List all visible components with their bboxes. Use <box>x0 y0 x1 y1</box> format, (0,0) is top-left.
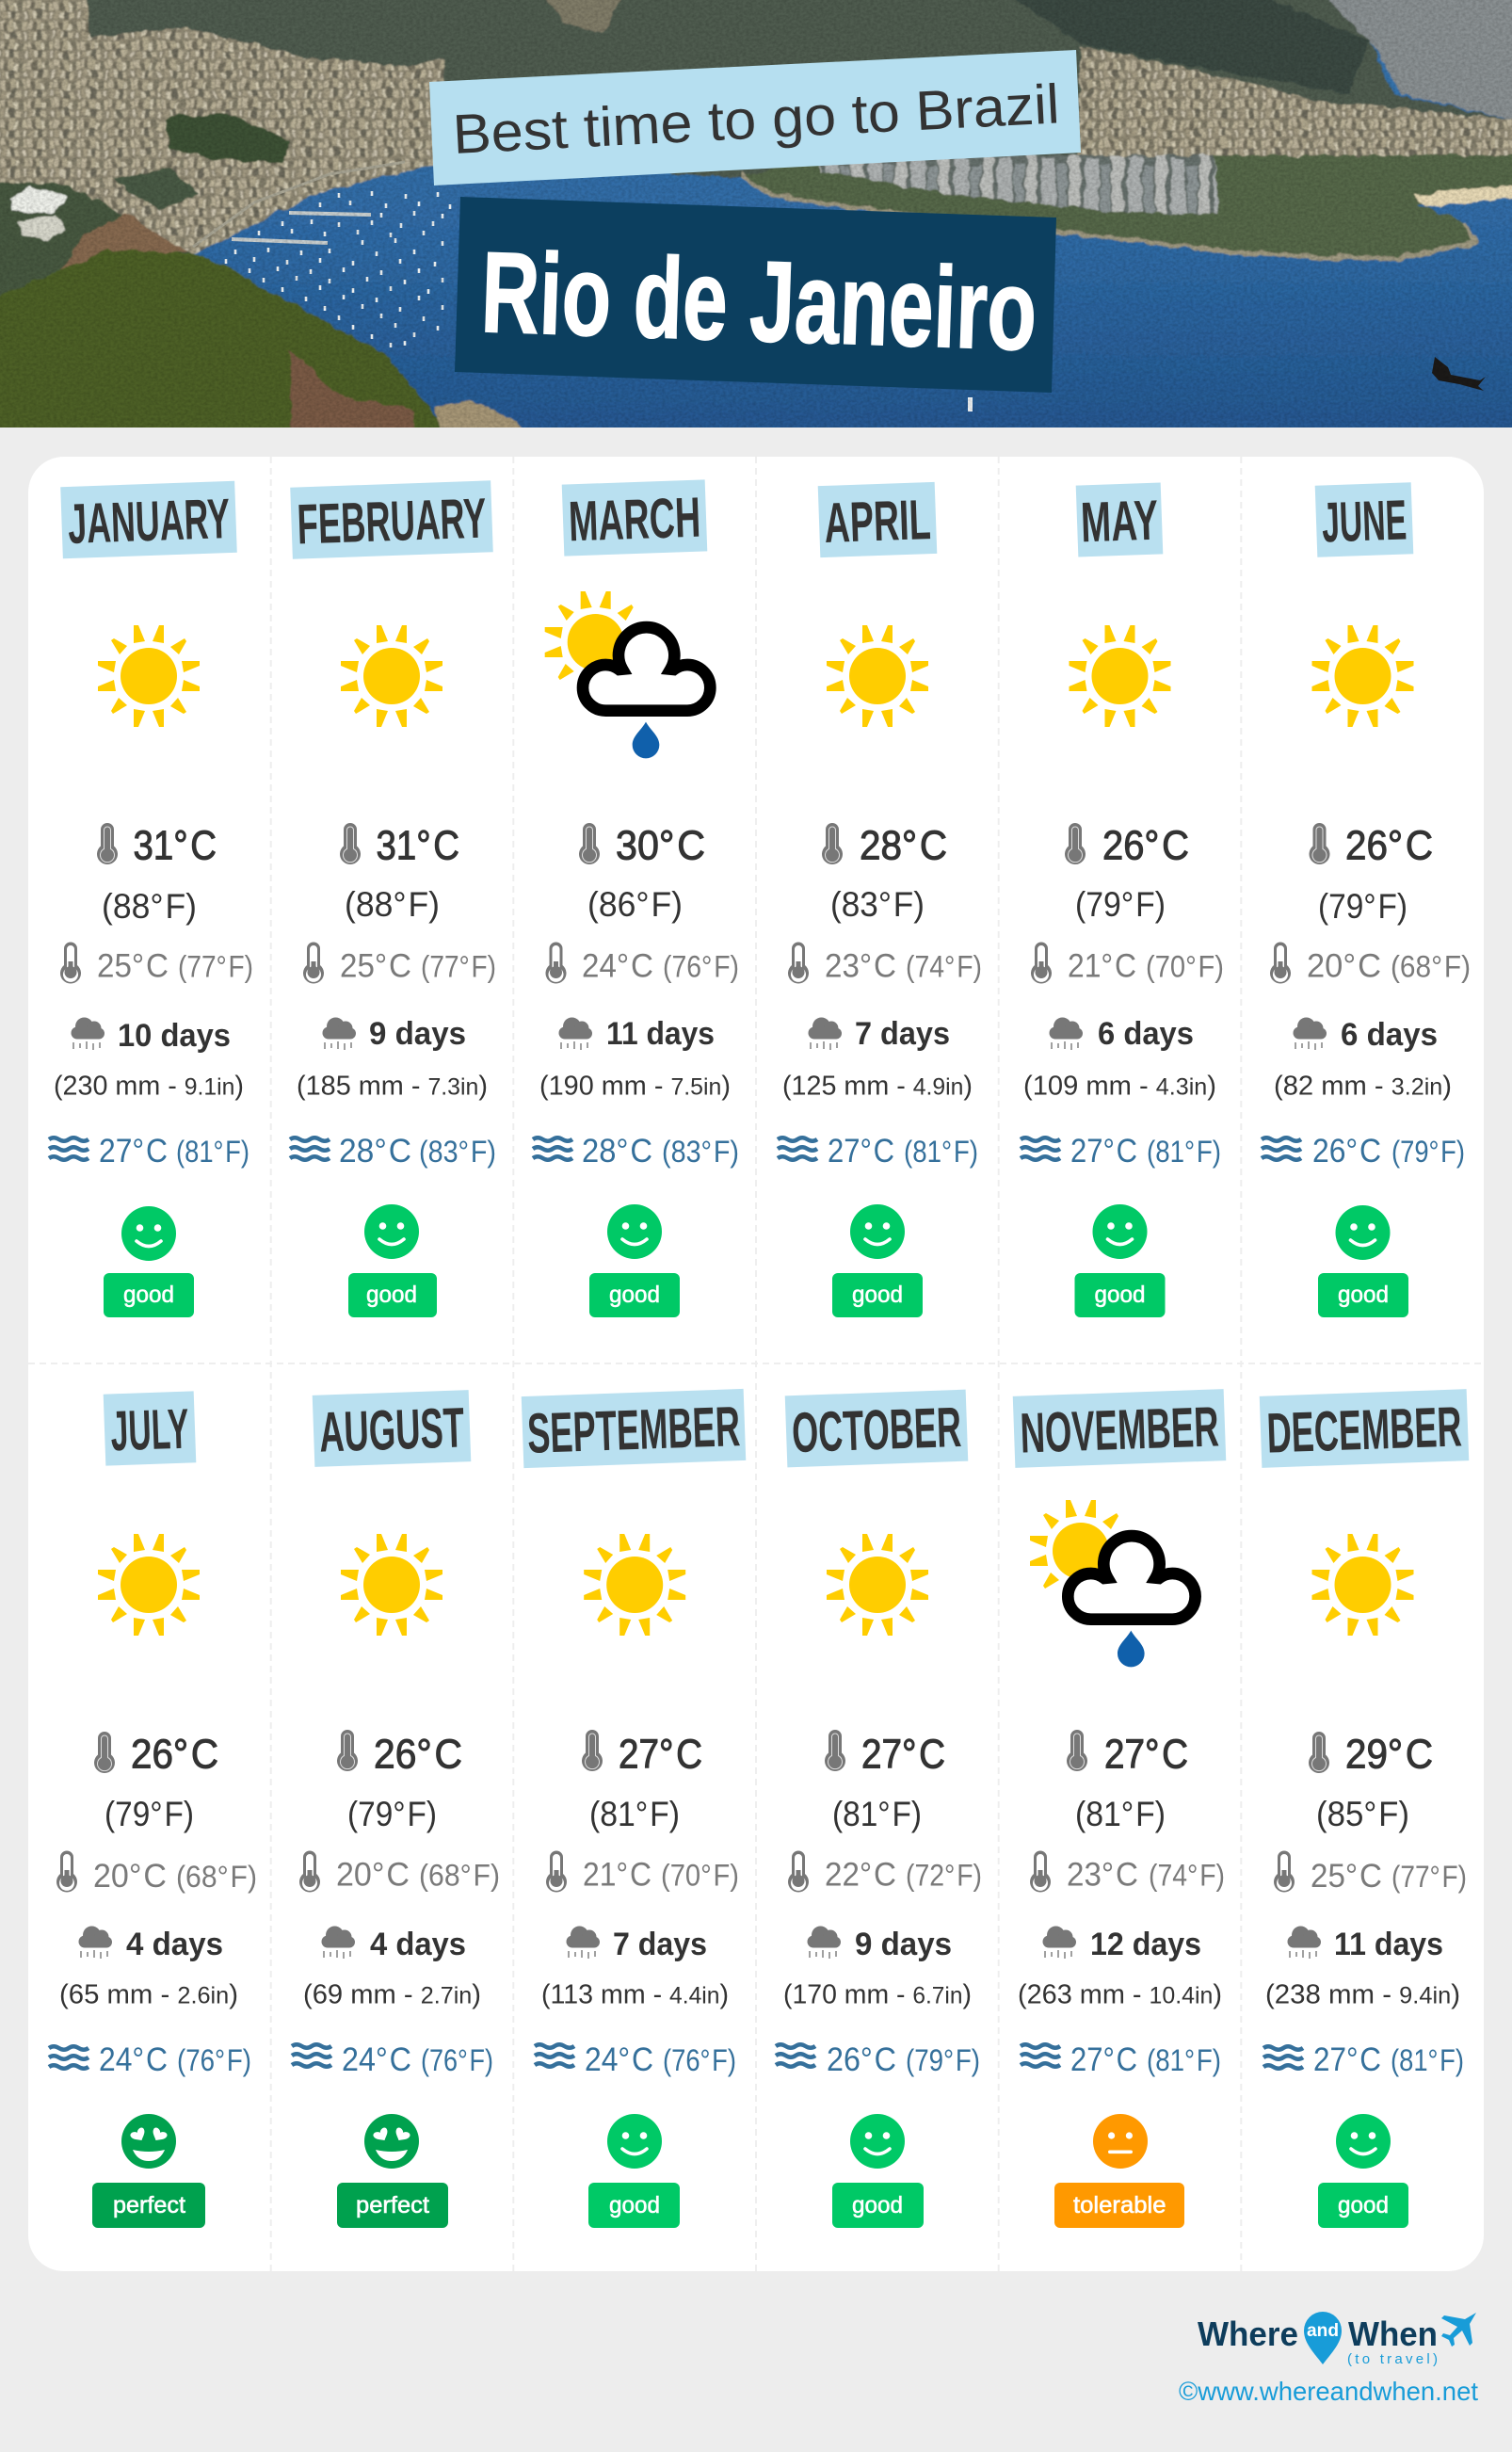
high temperature: 29°C <box>1345 1731 1433 1778</box>
low temperature: (68°F) <box>176 1860 257 1894</box>
rainy days: 9 days <box>855 1927 952 1962</box>
high temperature Fahrenheit: (81°F) <box>1075 1795 1166 1833</box>
sea temperature: 28°C <box>582 1133 652 1170</box>
sea temperature: 24°C <box>99 2041 168 2078</box>
rating: good: good <box>123 1282 174 1308</box>
high temperature Fahrenheit: (85°F) <box>1316 1795 1409 1833</box>
rainfall: (170 mm - 6.7in) <box>783 1979 972 2009</box>
month label: August: AUGUST <box>318 1395 465 1464</box>
low temperature <box>788 942 982 985</box>
low temperature: (70°F) <box>1146 949 1224 983</box>
low temperature: 21°C <box>583 1857 651 1893</box>
low temperature <box>546 942 739 985</box>
low temperature <box>546 1851 739 1893</box>
high temperature: 30°C <box>616 823 705 868</box>
rating: good: good <box>1094 1282 1145 1308</box>
high temperature <box>340 823 459 868</box>
rainy days: 7 days <box>855 1016 950 1052</box>
month label: September: SEPTEMBER <box>526 1395 741 1465</box>
high temperature <box>822 823 947 868</box>
sea temperature: 27°C <box>99 1133 168 1170</box>
sea temperature: (79°F) <box>1391 1135 1465 1169</box>
sea temperature: 24°C <box>342 2041 411 2078</box>
high temperature Fahrenheit: (79°F) <box>105 1795 194 1833</box>
sea temperature: 28°C <box>339 1133 411 1170</box>
marina boats <box>226 191 450 347</box>
rating: good: good <box>609 2192 660 2218</box>
high temperature: 31°C <box>377 823 459 868</box>
panel: December <box>1260 1389 1469 2228</box>
rainy days <box>1288 1927 1443 1962</box>
icon: sun <box>1312 625 1414 727</box>
low temperature: (74°F) <box>1149 1859 1225 1893</box>
high temperature: 31°C <box>134 823 217 868</box>
rainy days <box>808 1927 952 1962</box>
high temperature <box>94 1731 218 1778</box>
logo: Where and When to travel: (to travel) <box>1347 2351 1438 2367</box>
rating: good <box>589 1204 680 1317</box>
high temperature <box>825 1730 945 1778</box>
rating: good: good <box>366 1282 417 1308</box>
high temperature: 26°C <box>374 1731 462 1778</box>
title banner: Rio de Janeiro <box>479 228 1038 375</box>
icon: sun <box>98 1534 200 1636</box>
sea temperature <box>1021 1133 1221 1170</box>
panel: March <box>533 479 739 1317</box>
rainy days <box>808 1016 950 1052</box>
icon: sun <box>341 1534 442 1636</box>
low temperature <box>1270 942 1471 985</box>
low temperature: 25°C <box>340 947 411 985</box>
high temperature: 28°C <box>860 823 947 868</box>
rating: tolerable <box>1054 2114 1184 2228</box>
website credit: ©www.whereandwhen.net <box>1179 2377 1478 2406</box>
logo: Where and When to travel: Where <box>1198 2315 1298 2353</box>
month label: January: JANUARY <box>67 487 231 556</box>
rainy days <box>72 1017 231 1054</box>
rainfall: (82 mm - 3.2in) <box>1274 1072 1452 1102</box>
icon: sun <box>1312 1534 1414 1636</box>
panel: February <box>290 480 496 1317</box>
high temperature <box>337 1730 462 1778</box>
rating: perfect: perfect <box>356 2192 429 2218</box>
sea temperature <box>1021 2041 1221 2078</box>
low temperature <box>1030 1851 1225 1893</box>
low temperature: (77°F) <box>178 949 253 983</box>
low temperature: (72°F) <box>906 1859 982 1893</box>
rainfall: (190 mm - 7.5in) <box>539 1072 731 1102</box>
sea temperature <box>778 1133 978 1170</box>
low temperature: (70°F) <box>661 1859 739 1893</box>
sea temperature: (83°F) <box>662 1135 739 1169</box>
sea temperature: (76°F) <box>663 2043 736 2077</box>
month label: May: MAY <box>1080 489 1159 554</box>
month label: April: APRIL <box>823 488 932 555</box>
panel: July <box>49 1391 257 2228</box>
panel: May <box>1021 482 1224 1317</box>
rainy days <box>559 1016 715 1052</box>
low temperature: (77°F) <box>421 949 496 983</box>
rating: tolerable: tolerable <box>1073 2192 1166 2218</box>
month label: July <box>104 1391 196 1466</box>
rating: good: good <box>852 1282 903 1308</box>
low temperature <box>303 942 496 985</box>
panel: April <box>778 482 982 1317</box>
low temperature <box>56 1851 257 1895</box>
rainy days: 9 days <box>369 1016 466 1052</box>
low temperature <box>1274 1851 1467 1895</box>
rainy days: 6 days <box>1098 1016 1194 1052</box>
month label: July: JULY <box>109 1397 190 1462</box>
sea temperature: 27°C <box>1070 2041 1137 2078</box>
sea temperature <box>49 2041 251 2078</box>
rainy days <box>322 1927 466 1962</box>
panel: monthly weather card <box>28 457 1484 2271</box>
rating: good <box>1318 2114 1408 2228</box>
rainy days: 4 days <box>370 1927 466 1962</box>
low temperature: 25°C <box>97 947 169 985</box>
high temperature Fahrenheit: (79°F) <box>347 1795 437 1833</box>
month label: May <box>1076 482 1163 557</box>
rating: good: good <box>852 2192 903 2218</box>
rainfall: (69 mm - 2.7in) <box>303 1979 481 2009</box>
high temperature: 27°C <box>861 1731 945 1778</box>
high temperature <box>1309 823 1433 868</box>
low temperature: 20°C <box>1307 947 1381 985</box>
high temperature: 26°C <box>1345 823 1433 868</box>
rating: good <box>104 1206 194 1317</box>
rating: perfect <box>337 2114 448 2228</box>
logo: Where and When to travel: When <box>1348 2315 1438 2353</box>
high temperature Fahrenheit: (79°F) <box>1075 885 1166 924</box>
sea temperature: (76°F) <box>177 2043 251 2077</box>
low temperature: (77°F) <box>1391 1860 1467 1894</box>
rainfall: (113 mm - 4.4in) <box>541 1979 729 2009</box>
panel: September <box>522 1389 746 2228</box>
rating: good <box>588 2114 680 2228</box>
low temperature: 24°C <box>582 947 653 985</box>
high temperature Fahrenheit: (88°F) <box>345 885 440 924</box>
sea temperature: 24°C <box>585 2041 653 2078</box>
high temperature Fahrenheit: (86°F) <box>587 885 683 924</box>
high temperature Fahrenheit: (79°F) <box>1318 887 1407 926</box>
rainfall: (109 mm - 4.3in) <box>1023 1072 1216 1102</box>
month label: March <box>562 479 707 557</box>
rainy days <box>567 1927 707 1962</box>
icon: sun <box>827 625 928 727</box>
panel: October <box>776 1390 982 2228</box>
rainy days <box>1294 1017 1438 1053</box>
sea temperature: (83°F) <box>419 1135 496 1169</box>
rating: good <box>832 2114 924 2228</box>
sea temperature <box>776 2041 980 2078</box>
low temperature: 21°C <box>1068 947 1136 985</box>
low temperature: 23°C <box>825 947 896 985</box>
month label: October <box>785 1390 968 1467</box>
high temperature <box>1309 1731 1433 1778</box>
rating: good <box>832 1204 923 1317</box>
panel: August <box>292 1390 500 2228</box>
rainy days <box>1049 1016 1194 1052</box>
rainy days: 6 days <box>1341 1017 1438 1053</box>
sea temperature <box>1263 2041 1464 2078</box>
icon: sun <box>827 1534 928 1636</box>
rating: good <box>1318 1205 1408 1317</box>
low temperature <box>299 1851 500 1893</box>
high temperature: 27°C <box>1104 1731 1188 1778</box>
month label: February: FEBRUARY <box>296 487 488 556</box>
month label: February <box>290 480 493 559</box>
rainfall: (238 mm - 9.4in) <box>1265 1979 1460 2009</box>
sea temperature <box>535 2041 736 2078</box>
month label: November <box>1013 1389 1226 1468</box>
month label: June <box>1315 482 1413 557</box>
sea temperature <box>1262 1133 1465 1170</box>
low temperature: (76°F) <box>663 949 739 983</box>
low temperature: (68°F) <box>419 1859 500 1893</box>
low temperature <box>60 942 253 985</box>
low temperature: (68°F) <box>1391 949 1471 983</box>
low temperature: 22°C <box>825 1857 896 1893</box>
high temperature: 26°C <box>131 1731 218 1778</box>
sea temperature <box>533 1133 739 1170</box>
rainfall: (65 mm - 2.6in) <box>59 1979 238 2009</box>
low temperature: 20°C <box>336 1857 410 1893</box>
sea temperature: (81°F) <box>1147 2043 1221 2077</box>
title banner <box>455 197 1056 393</box>
high temperature Fahrenheit: (81°F) <box>832 1795 922 1833</box>
rainy days: 12 days <box>1090 1927 1201 1962</box>
rainfall: (230 mm - 9.1in) <box>54 1072 244 1102</box>
panel: June <box>1262 482 1471 1317</box>
sea temperature: 27°C <box>1070 1133 1137 1170</box>
sea temperature: (81°F) <box>1147 1135 1221 1169</box>
subtitle banner: Best time to go to Brazil <box>451 73 1061 166</box>
month label: November: NOVEMBER <box>1019 1395 1220 1465</box>
month label: October: OCTOBER <box>791 1395 962 1464</box>
low temperature: 20°C <box>93 1858 167 1895</box>
rating: good: good <box>1338 1282 1389 1308</box>
high temperature Fahrenheit: (88°F) <box>102 887 197 926</box>
rainy days: 10 days <box>118 1018 231 1054</box>
low temperature: 25°C <box>1311 1858 1382 1895</box>
rainy days <box>322 1016 466 1052</box>
icon: sun, cloud and rain <box>1030 1500 1196 1667</box>
rainy days: 11 days <box>606 1016 715 1052</box>
rainfall: (263 mm - 10.4in) <box>1018 1979 1222 2009</box>
month label: June: JUNE <box>1321 488 1407 555</box>
high temperature Fahrenheit: (83°F) <box>830 885 925 924</box>
sea temperature: (81°F) <box>904 1135 978 1169</box>
rating: good <box>348 1204 437 1317</box>
sea temperature <box>292 2041 493 2078</box>
sea temperature: (76°F) <box>421 2043 493 2077</box>
logo: Where and When to travel: and <box>1307 2321 1339 2341</box>
logo: Where and When to travel <box>1198 2312 1476 2367</box>
rating: good: good <box>609 1282 660 1308</box>
high temperature Fahrenheit: (81°F) <box>589 1795 680 1833</box>
low temperature: (74°F) <box>906 949 982 983</box>
sea temperature: 26°C <box>827 2041 896 2078</box>
rainy days <box>79 1927 223 1962</box>
sea temperature <box>49 1133 249 1170</box>
rating: good <box>1075 1204 1166 1317</box>
high temperature <box>1067 1730 1188 1778</box>
header photo of Rio de Janeiro bay <box>0 0 1512 437</box>
rating: good: good <box>1338 2192 1389 2218</box>
month label: March: MARCH <box>568 486 701 553</box>
panel: November <box>1013 1389 1226 2228</box>
month label: August <box>313 1390 471 1467</box>
rating: perfect: perfect <box>113 2192 185 2218</box>
icon: plane <box>1441 2313 1476 2347</box>
panel: January <box>49 481 253 1317</box>
high temperature <box>97 823 217 868</box>
rainy days: 11 days <box>1334 1927 1443 1962</box>
low temperature: 23°C <box>1067 1857 1138 1893</box>
high temperature <box>579 823 705 868</box>
month label: April <box>818 482 937 557</box>
high temperature <box>1065 823 1189 868</box>
rainy days: 7 days <box>613 1927 707 1962</box>
sea temperature: 27°C <box>828 1133 894 1170</box>
sea temperature: 27°C <box>1313 2041 1381 2078</box>
subtitle banner <box>429 50 1081 186</box>
rating: perfect <box>92 2114 205 2228</box>
low temperature <box>1031 942 1224 985</box>
icon: sun <box>98 625 200 727</box>
sea temperature: (79°F) <box>906 2043 980 2077</box>
month label: January <box>60 481 237 558</box>
low temperature <box>788 1851 982 1893</box>
rainy days <box>1043 1927 1201 1962</box>
sea temperature <box>290 1133 496 1170</box>
month label: September <box>522 1389 746 1468</box>
icon: map pin <box>1304 2312 1342 2364</box>
high temperature: 27°C <box>619 1731 702 1778</box>
rainfall: (185 mm - 7.3in) <box>297 1072 488 1102</box>
sea temperature: (81°F) <box>1391 2043 1464 2077</box>
high temperature: 26°C <box>1102 823 1189 868</box>
icon: sun <box>1070 625 1171 727</box>
rainfall: (125 mm - 4.9in) <box>782 1072 973 1102</box>
icon: sun <box>584 1534 685 1636</box>
sea temperature: 26°C <box>1312 1133 1381 1170</box>
rainy days: 4 days <box>126 1927 223 1962</box>
high temperature <box>582 1730 702 1778</box>
icon: sun <box>341 625 442 727</box>
icon: sun, cloud and rain <box>545 591 710 758</box>
sea temperature: (81°F) <box>176 1135 249 1169</box>
